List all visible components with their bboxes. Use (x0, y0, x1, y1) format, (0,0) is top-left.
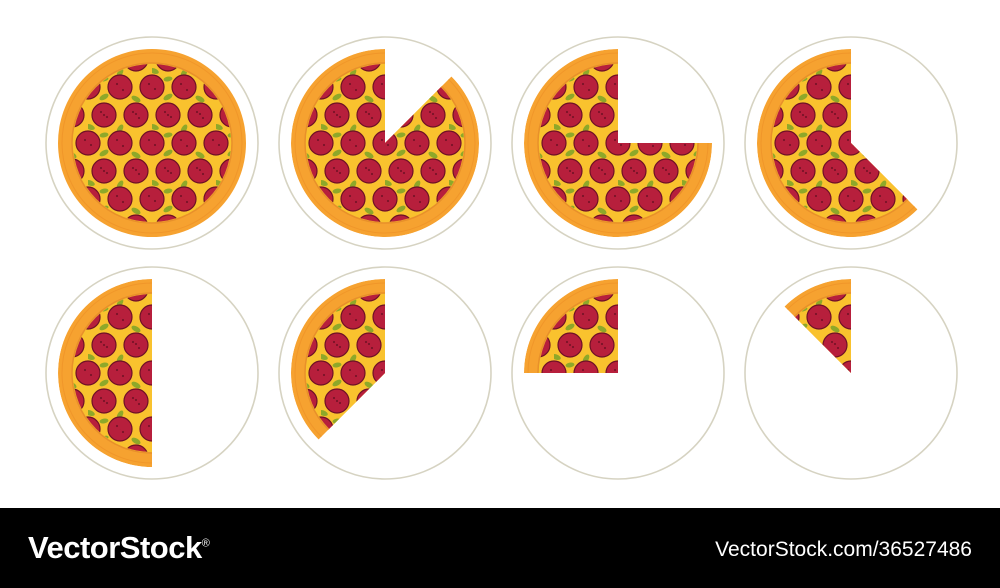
plate 8: one slice (745, 267, 957, 479)
plate 2: 7/8 pizza (279, 37, 491, 249)
plate 1: whole pizza (46, 37, 258, 249)
pizza illustration (45, 36, 958, 480)
plate 7: quarter pizza (512, 267, 724, 479)
image url: VectorStock.com/36527486 (715, 538, 972, 561)
plate 5: half pizza (46, 267, 258, 479)
logo text: VectorStock® (28, 530, 209, 565)
plate 4: 5/8 pizza (745, 37, 957, 249)
plate 3: 6/8 pizza (512, 37, 724, 249)
footer bar (0, 508, 1000, 588)
plate 6: 3/8 pizza (279, 267, 491, 479)
